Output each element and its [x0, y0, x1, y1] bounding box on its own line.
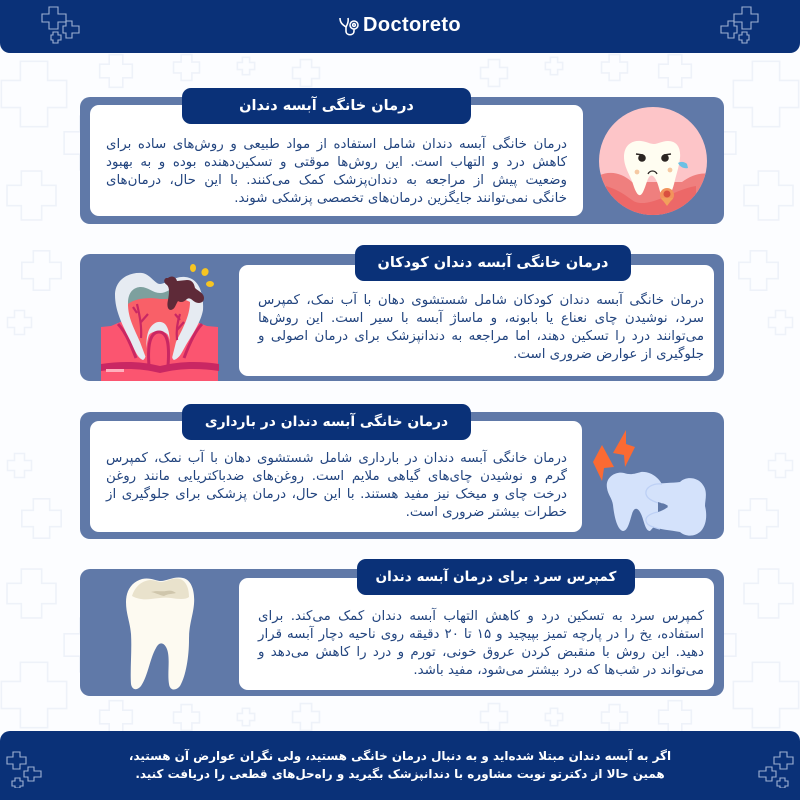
- text block: درخت چای و میخک نیز مفید هستند. با این حال، درمان پزشکی برای جلوگیری از: [106, 487, 567, 502]
- text block: گرم و نوشیدن چای‌های گیاهی ملایم است. روغن‌های ضدباکتریایی مانند روغن: [106, 469, 567, 484]
- text block: [257, 608, 704, 678]
- text block: استفاده، یخ را در پارچه تمیز بپیچید و ۱۵ تا ۲۰ دقیقه روی ناحیه دچار آبسه قرار: [258, 627, 704, 642]
- text block: [105, 450, 567, 520]
- panel: home treatment for children: [80, 245, 724, 381]
- icon: two colliding teeth with pain bolts: [593, 430, 706, 536]
- text block: خانگی نمی‌توانند جایگزین درمان‌های تخصصی پزشکی شوند.: [234, 191, 567, 206]
- heading: [182, 404, 471, 440]
- icon: right crosses: [758, 752, 794, 788]
- panel: cold compress: [80, 559, 724, 696]
- panel: home treatment of tooth abscess: [80, 88, 724, 224]
- text block: درمان خانگی آبسه دندان شامل استفاده از مواد طبیعی و روش‌های ساده برای: [106, 137, 567, 152]
- text block: خطرات بیشتر ضروری است.: [406, 505, 567, 520]
- heading: درمان خانگی آبسه دندان کودکان: [377, 255, 608, 271]
- text block: جلوگیری از عوارض ضروری است.: [513, 347, 704, 362]
- heading: [357, 559, 635, 595]
- text block: دهید. این روش با منقبض کردن عروق خونی، تورم و درد را کاهش می‌دهد و: [258, 645, 704, 660]
- text block: درمان خانگی آبسه دندان در بارداری شامل شستشوی دهان با آب نمک، کمپرس: [106, 451, 567, 466]
- text block: کمپرس سرد به تسکین درد و کاهش التهاب آبسه دندان کمک می‌کند. برای: [258, 609, 704, 624]
- icon: left crosses: [41, 6, 80, 44]
- text block: [257, 292, 704, 362]
- call to action text: اگر به آبسه دندان مبتلا شده‌اید و به دنبال درمان خانگی هستید، ولی نگران عوارض آن هستید،: [129, 749, 671, 763]
- icon: stethoscope logo: [339, 18, 359, 36]
- heading: درمان خانگی آبسه دندان: [239, 98, 414, 114]
- heading: [355, 245, 631, 281]
- heading: کمپرس سرد برای درمان آبسه دندان: [376, 569, 616, 585]
- icon: right crosses: [720, 6, 759, 44]
- heading: [182, 88, 471, 124]
- header bar: [0, 0, 800, 53]
- icon: tooth cross-section with decay: [101, 264, 219, 381]
- text block: می‌توانند درد را تسکین دهند، اما مراجعه به دندانپزشک برای درمان اصولی و: [258, 329, 704, 344]
- logo wordmark: Doctoreto: [363, 14, 461, 36]
- heading: درمان خانگی آبسه دندان در بارداری: [205, 414, 448, 430]
- icon: sad tooth with abscess: [599, 107, 707, 215]
- footer bar: [0, 731, 800, 800]
- text block: درمان خانگی آبسه دندان کودکان شامل شستشوی دهان با آب نمک، کمپرس: [258, 293, 704, 308]
- panel: home treatment during pregnancy: [80, 404, 724, 539]
- text block: وضعیت پیش از مراجعه به دندان‌پزشک کمک می‌کنند. با این حال، درمان‌های: [106, 173, 567, 188]
- text block: می‌تواند در شب‌ها که درد بیشتر می‌شود، مفید باشد.: [413, 663, 704, 678]
- call to action text: [129, 748, 671, 781]
- text block: [106, 136, 567, 206]
- call to action text: همین حالا از دکترتو نوبت مشاوره با دندانپزشک بگیرید و راه‌حل‌های قطعی را دریافت کنید.: [135, 767, 665, 781]
- icon: left crosses: [6, 752, 42, 788]
- text block: سرد، نوشیدن چای نعناع یا بابونه، و ماساژ آبسه با سیر است. این روش‌ها: [258, 311, 704, 326]
- icon: white molar tooth: [126, 578, 194, 690]
- text block: کاهش درد و التهاب است. این روش‌ها موقتی و تسکین‌دهنده بوده و به بهبود: [106, 155, 567, 170]
